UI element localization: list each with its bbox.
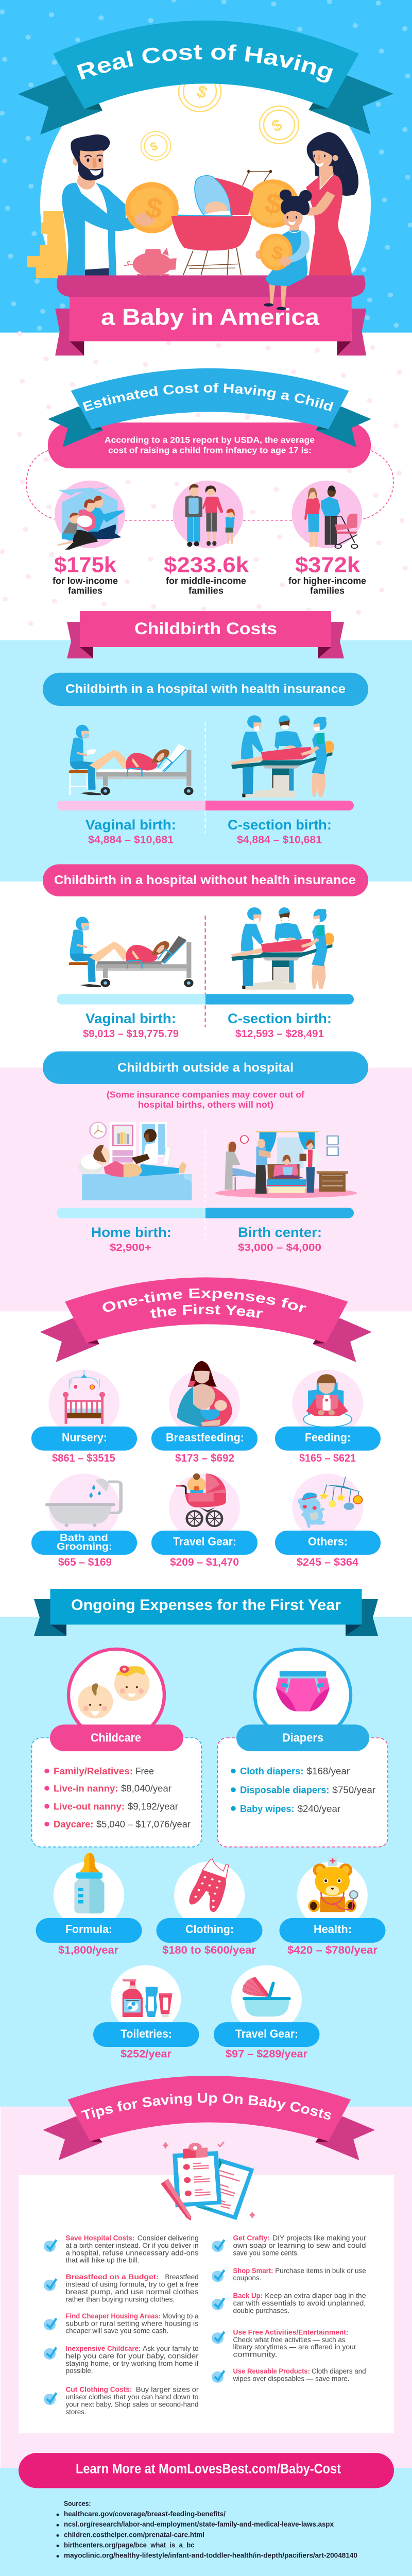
stat: middle income: families	[188, 585, 224, 596]
card: breastfeeding	[151, 1427, 258, 1464]
banner	[48, 368, 371, 447]
card: travel gear: $209 – $1,470	[170, 1556, 239, 1568]
card: nursery: $861 – $3515	[52, 1452, 115, 1464]
stat: higher income: families	[310, 585, 345, 596]
cost bar	[57, 994, 354, 1005]
banner heading: One-time Expenses for	[102, 1288, 306, 1312]
label: home birth: Home birth:	[91, 1224, 171, 1240]
tip: use free activities: community.	[233, 2351, 278, 2359]
father's hand	[135, 213, 155, 226]
circles	[55, 481, 363, 548]
list: childcare costs	[44, 1766, 191, 1829]
illustration: birth center	[215, 1132, 357, 1198]
tip: save hospital costs: Save Hospital Costs:	[66, 2234, 135, 2242]
background: pink out-of-hospital section	[0, 1067, 412, 1312]
pill heading: Childbirth in a hospital with health insurance	[65, 683, 346, 696]
illustration: vaginal birth	[69, 725, 194, 795]
hero dots pattern	[0, 0, 412, 331]
list: diaper costs: $240/year	[298, 1803, 340, 1814]
one-time expense cards	[31, 1361, 381, 1568]
hero illustration: family with coins and crib	[27, 132, 358, 279]
ongoing expense cards	[36, 1853, 385, 2060]
list: diaper costs: $168/year	[307, 1766, 350, 1776]
tip: find cheaper housing: suburb or rural setting where housing is	[66, 2320, 199, 2327]
heading text: Ongoing Expenses for the First Year	[71, 1597, 341, 1614]
sources list: children.costhelper.com/prenatal-care.html	[64, 2531, 204, 2538]
label: home birth: $2,900+	[110, 1242, 151, 1253]
label: home birth	[91, 1224, 171, 1253]
note	[107, 1090, 304, 1110]
tip: get crafty: Get Crafty:	[233, 2234, 270, 2242]
tip: cut clothing costs: Buy larger sizes or	[136, 2386, 199, 2394]
banner: one-time expenses: the First Year	[150, 1304, 263, 1318]
card: formula: Formula:	[65, 1923, 112, 1936]
panel: tips white card	[19, 2175, 394, 2433]
illustration: c-section	[231, 907, 334, 990]
card: others: Others:	[308, 1535, 348, 1548]
background: light blue sources section	[0, 2468, 412, 2576]
label: c-section birth	[228, 1011, 332, 1040]
tip: shop smart: Purchase items in bulk or use	[275, 2267, 366, 2275]
tip: cut clothing costs: Cut Clothing Costs:	[66, 2386, 132, 2394]
heading ribbon: ongoing expenses	[34, 1589, 378, 1636]
card: travel gear	[151, 1531, 258, 1568]
icon: middle income family	[185, 484, 235, 547]
tip: inexpensive childcare: Inexpensive Childcare:	[66, 2345, 141, 2352]
tip: use free activities: library storytimes — are offered in your	[233, 2344, 356, 2351]
circle backdrops	[54, 1861, 368, 2033]
label: birth center	[238, 1224, 322, 1253]
card: travel gear	[214, 2022, 319, 2060]
pill heading: Childbirth outside a hospital	[117, 1061, 294, 1075]
card: clothing: Clothing:	[185, 1923, 234, 1936]
pedestal and bottom ribbon	[55, 276, 366, 355]
label: vaginal birth	[85, 817, 176, 845]
floating gold coins	[141, 71, 299, 160]
label: c-section birth: C-section birth:	[228, 1011, 332, 1026]
card: travel gear: $97 – $289/year	[226, 2048, 308, 2060]
icon: bath	[45, 1479, 121, 1527]
floating gold coins: $	[148, 139, 160, 154]
pink intro pill	[48, 422, 371, 468]
tip: use free activities: Use Free Activities/Entertainment:	[233, 2329, 348, 2336]
tip: back up: double purchases.	[233, 2307, 289, 2314]
card: others	[275, 1531, 381, 1568]
pill: childcare	[50, 1724, 183, 1751]
ribbon tails	[55, 309, 84, 355]
tip: breastfeed on a budget: Breastfeed	[165, 2273, 199, 2281]
pill heading	[43, 673, 368, 706]
banner: tips	[43, 2076, 375, 2160]
illustration: vaginal birth	[69, 917, 194, 987]
intro text: cost of raising a child from infancy to age 17 is:	[108, 445, 312, 455]
tip: inexpensive childcare: Ask your family to	[143, 2345, 199, 2352]
list: diaper costs: $750/year	[332, 1785, 375, 1795]
tip: use free activities	[212, 2329, 356, 2359]
tip: find cheaper housing	[44, 2312, 199, 2335]
background: white family section	[0, 333, 412, 640]
icon: stroller	[176, 1473, 226, 1526]
label: birth center: $3,000 – $4,000	[238, 1242, 321, 1253]
sources list: healthcare.gov/coverage/breast-feeding-benefits/	[64, 2510, 226, 2518]
list: childcare costs: Family/Relatives:	[54, 1766, 133, 1776]
list: childcare costs: Live-in nanny:	[54, 1783, 118, 1794]
dashed box	[32, 1738, 202, 1847]
intro text	[105, 435, 315, 455]
call to action pill	[19, 2453, 394, 2488]
card: bath and grooming: $65 – $169	[58, 1556, 112, 1568]
ring	[68, 1649, 164, 1741]
mother	[306, 132, 358, 276]
crib coin	[248, 179, 299, 228]
sources list: ncsl.org/research/labor-and-employment/state-family-and-medical-leave-laws.aspx	[64, 2520, 334, 2528]
ribbon main	[70, 295, 352, 341]
tip: use reusable products: Cloth diapers and	[312, 2367, 366, 2375]
card: breastfeeding: Breastfeeding:	[166, 1431, 244, 1444]
icon: teddy doctor	[308, 1857, 357, 1912]
tip: use reusable products	[212, 2367, 366, 2383]
label: vaginal birth: Vaginal birth:	[85, 817, 176, 833]
card: feeding: $165 – $621	[299, 1452, 356, 1464]
heading ribbon: childbirth costs	[67, 611, 344, 658]
floating gold coins: $	[269, 115, 285, 135]
banner heading: Tips for Saving Up On Baby Costs	[81, 2093, 331, 2120]
tip: save hospital costs: at a birth center instead. Or if you deliver in	[66, 2242, 199, 2249]
tip: save hospital costs: that will hike up the bill.	[66, 2257, 140, 2264]
label: vaginal birth: Vaginal birth:	[85, 1011, 176, 1026]
title line 2: a Baby in America	[101, 304, 320, 330]
background: white uninsured section	[0, 882, 412, 1067]
white section dots pattern	[0, 331, 408, 626]
card: others: $245 – $364	[297, 1556, 358, 1568]
stat: higher income: for higher-income	[288, 575, 366, 586]
coin dollar signs: $	[142, 191, 165, 226]
card: health: Health:	[314, 1923, 352, 1936]
floating gold coins: $	[194, 82, 210, 103]
girl with coin: $	[270, 241, 285, 264]
tip: get crafty	[212, 2234, 366, 2257]
section: estimated cost of having a child	[26, 368, 394, 596]
hero illustration: family with coins and crib: $	[262, 187, 285, 222]
pill: childcare: Childcare	[91, 1731, 141, 1744]
tip: use reusable products: wipes over disposables — save more.	[233, 2375, 350, 2383]
card: bath and grooming: Bath and	[60, 1532, 108, 1544]
list: diaper costs: Disposable diapers:	[240, 1785, 330, 1795]
list: childcare costs: Live-out nanny:	[54, 1801, 125, 1812]
banner: one-time expenses	[40, 1277, 372, 1362]
tip: breastfeed on a budget: breast pump, and use normal clothes	[66, 2288, 199, 2296]
pill: diapers	[236, 1724, 369, 1751]
sources list	[57, 2500, 357, 2559]
tip: back up: Back Up:	[233, 2292, 263, 2300]
divider	[205, 722, 206, 833]
banner heading: Estimated Cost of Having a Child	[82, 383, 334, 412]
background: blue hero	[0, 0, 412, 333]
list: childcare costs: Daycare:	[54, 1819, 94, 1829]
card: toiletries: Toiletries:	[121, 2027, 172, 2040]
tip: get crafty: save you some cents.	[233, 2249, 299, 2257]
tip: cut clothing costs: stores.	[66, 2408, 87, 2416]
stat: low income: families	[68, 585, 102, 596]
list: childcare costs: $5,040 – $17,076/year	[96, 1819, 191, 1829]
title line 1: Real Cost of Having	[77, 44, 333, 82]
card: toiletries: $252/year	[121, 2048, 172, 2060]
pill heading	[43, 865, 368, 896]
tip: inexpensive childcare	[44, 2345, 199, 2375]
list: diaper costs	[231, 1766, 375, 1814]
tip: use free activities: Check what free activities — such as	[233, 2336, 346, 2344]
stat: middle income: for middle-income	[166, 575, 246, 586]
card: bath and grooming	[31, 1531, 137, 1568]
icon: teddy and mobile	[298, 1477, 363, 1528]
tip: save hospital costs	[44, 2234, 199, 2264]
card: toiletries	[93, 2022, 199, 2060]
sources list: Sources:	[64, 2500, 91, 2507]
tip: get crafty: own soap or learning to sew and could	[233, 2242, 366, 2249]
stat: low income: for low-income	[53, 575, 118, 586]
sources list: birthcenters.org/page/bce_what_is_a_bc	[64, 2541, 195, 2549]
panel: hospital without insurance	[43, 865, 368, 1040]
tip: inexpensive childcare: help you care for your baby, consider	[66, 2352, 199, 2360]
tip: inexpensive childcare: possible.	[66, 2367, 93, 2375]
card: formula: $1,800/year	[58, 1944, 119, 1956]
card: clothing	[157, 1918, 263, 1956]
stat: middle income	[164, 553, 249, 596]
girl with coin	[255, 190, 312, 310]
tip: shop smart	[212, 2267, 366, 2282]
label: c-section birth: $4,884 – $10,681	[237, 834, 322, 845]
card: clothing: $180 to $600/year	[162, 1944, 256, 1956]
list: diaper costs: Cloth diapers:	[240, 1766, 303, 1776]
panel: outside a hospital	[43, 1052, 368, 1253]
card: nursery	[31, 1427, 137, 1464]
icon: bottle	[74, 1853, 105, 1913]
circle backdrops	[48, 1369, 363, 1541]
call to action pill: Learn More at MomLovesBest.com/Baby-Cost	[76, 2461, 341, 2477]
stat: low income: $175k	[54, 553, 116, 577]
tip: back up: car with essentials to avoid unplanned,	[233, 2299, 366, 2307]
label: c-section birth: C-section birth:	[228, 817, 332, 833]
icon: breastfeeding	[177, 1361, 232, 1427]
icon: clipboard and pen	[161, 2142, 255, 2221]
tip: back up: Keep an extra diaper bag in the	[265, 2292, 366, 2300]
stat: higher income	[288, 553, 366, 596]
tip: use reusable products: Use Reusable Products:	[233, 2367, 310, 2375]
divider	[205, 1129, 206, 1241]
list: childcare costs: Free	[135, 1766, 154, 1776]
card: bath and grooming: Grooming:	[57, 1541, 112, 1552]
card: health: $420 – $780/year	[287, 1944, 378, 1956]
label: vaginal birth: $4,884 – $10,681	[88, 834, 174, 845]
panel: diapers	[217, 1649, 388, 1847]
pill: diapers: Diapers	[282, 1731, 323, 1744]
background: light blue insured section	[0, 640, 412, 882]
hero white circle	[40, 46, 371, 277]
stat: middle income: $233.6k	[164, 553, 249, 577]
pill heading	[43, 1052, 368, 1084]
tip: breastfeed on a budget: instead of using formula, try to get a free	[66, 2281, 199, 2289]
label: birth center: Birth center:	[238, 1224, 322, 1240]
dashed connector	[26, 451, 393, 520]
panel: childcare	[32, 1649, 202, 1847]
icon: travel bassinet	[242, 1977, 291, 2016]
cost bar	[57, 1208, 354, 1218]
list: childcare costs: $8,040/year	[121, 1783, 171, 1794]
stat: higher income: $372k	[295, 553, 360, 577]
icon: higher income family	[304, 485, 357, 548]
tip: find cheaper housing: Find Cheaper Housing Areas:	[66, 2312, 161, 2320]
card: feeding	[275, 1427, 381, 1464]
card: nursery: Nursery:	[62, 1431, 107, 1444]
card: formula	[36, 1918, 142, 1956]
icon: onesie	[189, 1859, 229, 1912]
icon: feeding	[303, 1374, 352, 1427]
list: diaper costs: Baby wipes:	[240, 1803, 295, 1814]
stat: low income	[53, 553, 118, 596]
illustration: c-section	[231, 715, 334, 798]
cost bar	[57, 801, 354, 810]
tip: save hospital costs: a hospital, refuse unnecessary add-ons	[66, 2249, 199, 2257]
note: hospital births, others will not)	[138, 1099, 273, 1110]
divider	[205, 916, 206, 1027]
title banner top	[18, 21, 393, 135]
icon: diaper	[276, 1671, 330, 1711]
background: white one-time section	[0, 1312, 412, 1617]
background: pink tips section	[1, 2107, 412, 2468]
label: vaginal birth: $9,013 – $19,775.79	[83, 1028, 179, 1040]
father	[62, 134, 146, 276]
tip: get crafty: DIY projects like making your	[272, 2234, 366, 2242]
tip: breastfeed on a budget: rather than buying nursing clothes.	[66, 2296, 175, 2303]
piggy bank	[124, 247, 177, 279]
tip: inexpensive childcare: staying home, or try working from home if	[66, 2360, 199, 2367]
tip: cut clothing costs: unisex clothes that you can hand down to	[66, 2393, 199, 2401]
ribbon folds	[70, 341, 352, 355]
card: breastfeeding: $173 – $692	[175, 1452, 234, 1464]
father's coin	[125, 182, 179, 233]
panel: hospital with insurance	[43, 673, 368, 845]
pill heading: Childbirth in a hospital without health insurance	[54, 873, 356, 887]
tip: find cheaper housing: Moving to a	[162, 2312, 199, 2320]
icon: twin babies	[78, 1666, 149, 1719]
tip: back up	[212, 2292, 366, 2314]
tip: breastfeed on a budget: Breastfeed on a Budget:	[66, 2273, 159, 2281]
tip: breastfeed on a budget	[44, 2273, 199, 2303]
list: childcare costs: $9,192/year	[128, 1801, 178, 1812]
tip: shop smart: coupons.	[233, 2274, 261, 2282]
icon: crib	[63, 1370, 105, 1424]
pedestal top	[57, 276, 366, 297]
card: health	[279, 1918, 385, 1956]
note: (Some insurance companies may cover out of	[107, 1090, 304, 1100]
icon: toiletries	[122, 1979, 173, 2017]
tip: find cheaper housing: cheaper will save you some cash.	[66, 2327, 168, 2335]
sources list: mayoclinic.org/healthy-lifestyle/infant-and-toddler-health/in-depth/pacifiers/art-20048140	[64, 2552, 357, 2559]
card: travel gear: Travel Gear:	[173, 1535, 236, 1548]
ring	[255, 1649, 351, 1741]
background: light blue ongoing section	[0, 1617, 412, 2107]
stack of gold coins	[27, 211, 69, 278]
label: c-section birth	[228, 817, 332, 845]
label: vaginal birth	[83, 1011, 179, 1040]
tip: cut clothing costs: your next baby. Shop sales or second-hand	[66, 2401, 199, 2408]
baby crib	[171, 170, 272, 275]
heading text: Childbirth Costs	[134, 620, 277, 638]
label: c-section birth: $12,593 – $28,491	[235, 1028, 324, 1040]
icon: low income family	[57, 487, 124, 550]
card: feeding: Feeding:	[305, 1431, 351, 1444]
card: travel gear: Travel Gear:	[235, 2027, 298, 2040]
tip: cut clothing costs	[44, 2386, 199, 2416]
dashed box	[217, 1738, 388, 1847]
intro text: According to a 2015 report by USDA, the average	[105, 435, 315, 445]
illustration: home birth	[78, 1122, 192, 1200]
tip: shop smart: Shop Smart:	[233, 2267, 273, 2275]
tip: save hospital costs: Consider delivering	[138, 2234, 199, 2242]
